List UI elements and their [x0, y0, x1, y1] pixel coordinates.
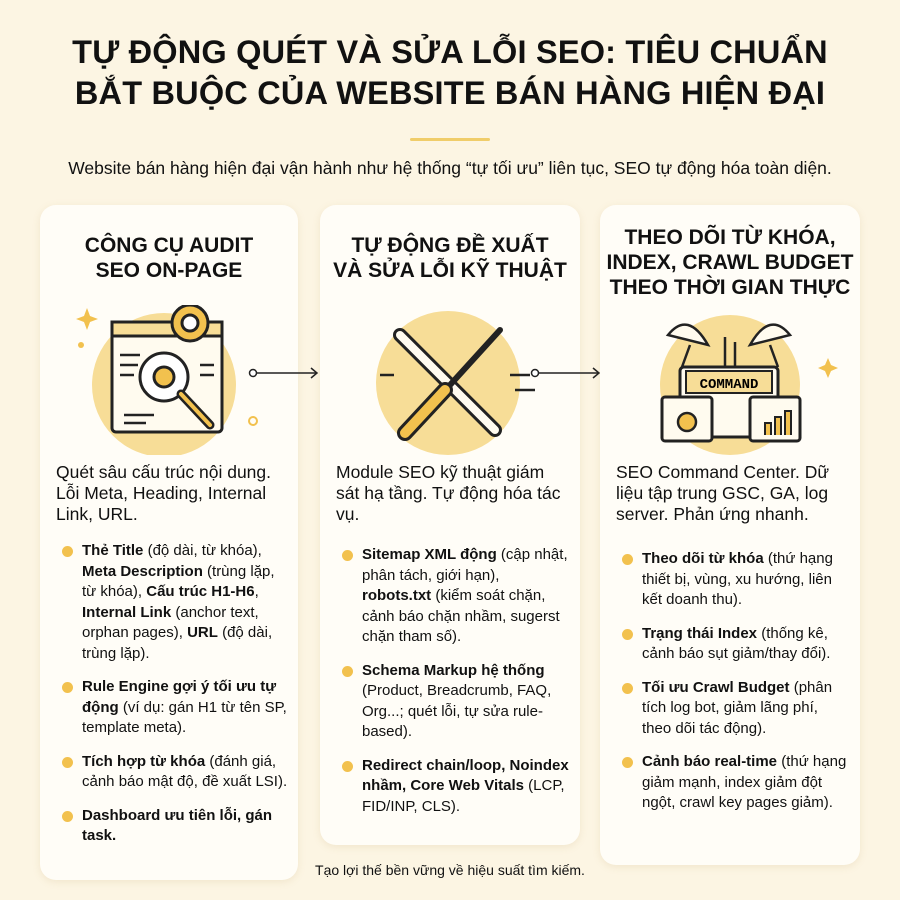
- panel: monitoring: INDEX, CRAWL BUDGET: [607, 251, 853, 274]
- arrow 2: [530, 368, 600, 379]
- subtitle: Website bán hàng hiện đại vận hành như hệ thống “tự tối ưu” liên tục, SEO tự động hóa toàn diện.: [68, 158, 832, 178]
- panel: monitoring: Trạng thái Index (thống kê, cảnh báo sụt giảm/thay đổi).: [642, 624, 830, 662]
- panel: audit: Dashboard ưu tiên lỗi, gán task.: [82, 806, 272, 844]
- panel: technical: Redirect chain/loop, Noindex nhầm, Core Web Vitals (LCP, FID/INP, CLS).: [362, 756, 569, 814]
- panel: monitoring: THEO DÕI TỪ KHÓA,: [624, 226, 836, 249]
- title: [72, 34, 828, 111]
- panel: audit: CÔNG CỤ AUDIT: [85, 234, 253, 257]
- panel: technical: Schema Markup hệ thống (Product, Breadcrumb, FAQ, Org...; quét lỗi, tự sửa rule-based).: [362, 662, 551, 740]
- icon: command center: COMMAND: [700, 377, 758, 393]
- panel: technical: [320, 205, 580, 845]
- panel: technical: TỰ ĐỘNG ĐỀ XUẤT: [351, 234, 549, 257]
- panel: audit: Rule Engine gợi ý tối ưu tự động (ví dụ: gán H1 từ tên SP, template meta).: [82, 678, 287, 736]
- panel: technical: Module SEO kỹ thuật giám sát hạ tầng. Tự động hóa tác vụ.: [336, 462, 560, 524]
- panel: audit: SEO ON-PAGE: [96, 259, 242, 282]
- panel: audit: Quét sâu cấu trúc nội dung. Lỗi Meta, Heading, Internal Link, URL.: [56, 462, 271, 524]
- panel: monitoring: Theo dõi từ khóa (thứ hạng thiết bị, vùng, xu hướng, liên kết doanh thu).: [642, 550, 833, 608]
- panel: monitoring: SEO Command Center. Dữ liệu tập trung GSC, GA, log server. Phản ứng nhanh.: [616, 462, 829, 524]
- panel: audit: Tích hợp từ khóa (đánh giá, cảnh báo mật độ, đề xuất LSI).: [82, 752, 287, 790]
- panel: monitoring: [600, 205, 860, 865]
- panel: audit: [40, 205, 298, 880]
- arrow 1: [248, 368, 318, 379]
- icon: audit: [76, 305, 258, 455]
- panel: monitoring: Cảnh báo real-time (thứ hạng giảm mạnh, index giảm đột ngột, crawl key pages giảm).: [642, 753, 846, 811]
- title: TỰ ĐỘNG QUÉT VÀ SỬA LỖI SEO: TIÊU CHUẨN: [72, 34, 828, 70]
- panel: technical: Sitemap XML động (cập nhật, phân tách, giới hạn), robots.txt (kiểm soát chặn, cảnh báo chặn nhầm, sugerst chặn tham số).: [362, 546, 568, 645]
- panel: monitoring: THEO THỜI GIAN THỰC: [610, 276, 850, 299]
- footer: Tạo lợi thế bền vững về hiệu suất tìm kiếm.: [315, 862, 585, 878]
- title: BẮT BUỘC CỦA WEBSITE BÁN HÀNG HIỆN ĐẠI: [75, 75, 825, 111]
- icon: command center: [660, 315, 838, 455]
- icon: tools: [376, 311, 535, 455]
- panel: technical: VÀ SỬA LỖI KỸ THUẬT: [333, 259, 567, 282]
- panel: audit: Thẻ Title (độ dài, từ khóa), Meta Description (trùng lặp, từ khóa), Cấu trúc H1-H6, Internal Link (anchor text, orphan pages), URL (độ dài, trùng lặp).: [82, 542, 275, 662]
- panel: monitoring: Tối ưu Crawl Budget (phân tích log bot, giảm lãng phí, theo dõi tác động).: [642, 678, 832, 736]
